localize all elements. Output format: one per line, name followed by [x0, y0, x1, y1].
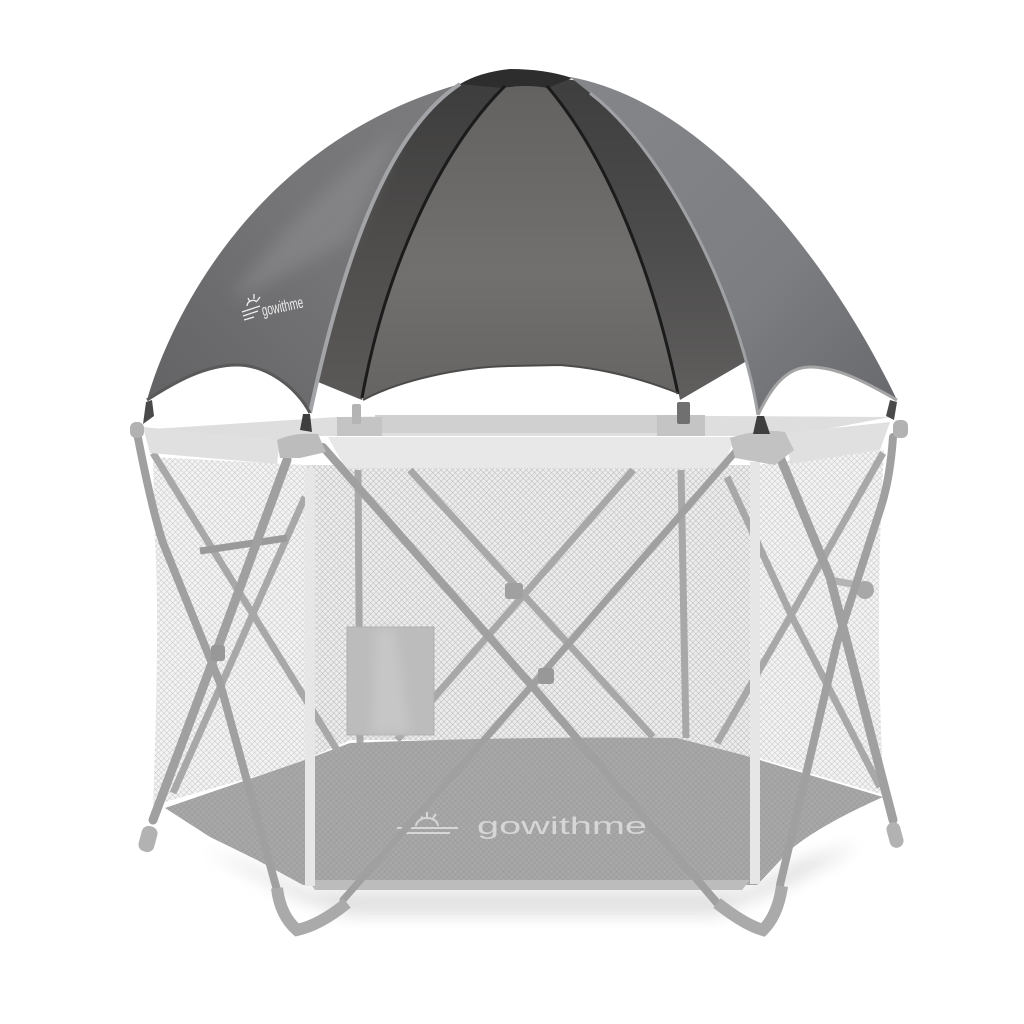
canopy logo text: gowithme	[260, 295, 305, 320]
mesh walls	[153, 450, 884, 805]
canopy right panel	[570, 77, 897, 415]
canopy left highlight	[230, 130, 400, 300]
canopy seams	[362, 86, 678, 398]
canopy dark inner left	[318, 84, 505, 400]
canopy right panel edge strip	[590, 93, 758, 415]
floor logo icon	[397, 812, 458, 833]
rear rim flap	[337, 415, 705, 436]
front rim band	[328, 437, 735, 468]
side knob	[856, 581, 874, 599]
top rim rear	[137, 415, 890, 442]
playpen floor mat	[165, 738, 883, 890]
canopy top hub	[460, 69, 572, 88]
front frame tubes	[137, 433, 893, 903]
canopy clips	[143, 400, 897, 434]
canopy logo icon	[242, 294, 260, 320]
right rim band	[787, 422, 890, 464]
floor shadow	[205, 845, 860, 916]
canopy left panel	[147, 84, 460, 413]
frame joints and feet	[130, 420, 908, 930]
canopy dark inner right	[548, 76, 745, 400]
canopy edge binding	[147, 365, 897, 415]
rear rim dark band	[375, 415, 705, 433]
back frame tubes	[153, 453, 883, 793]
left rim band	[143, 427, 280, 464]
mesh pocket	[347, 627, 434, 735]
canopy	[147, 69, 897, 415]
canopy left panel edge strip	[310, 84, 460, 413]
canopy back panel	[363, 84, 678, 400]
front corner straps	[305, 462, 760, 886]
floor logo text: gowithme	[477, 813, 647, 840]
